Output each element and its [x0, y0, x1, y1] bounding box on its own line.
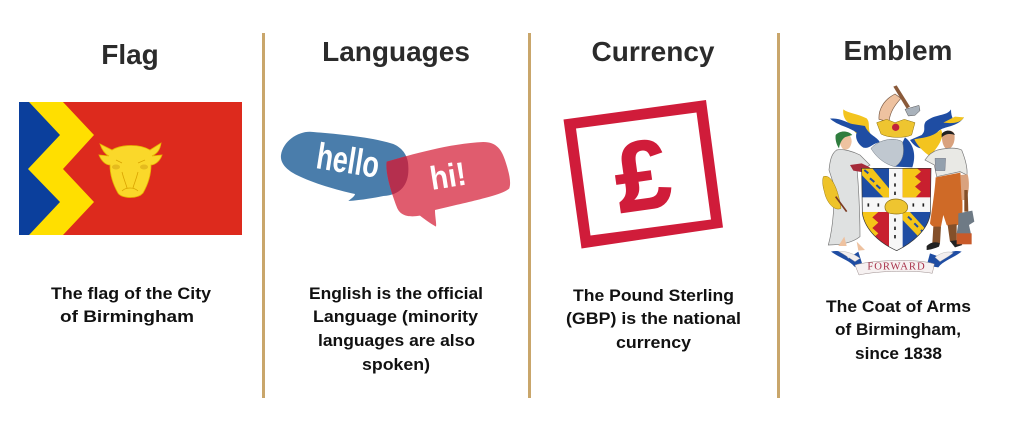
text: flag caption — [51, 285, 212, 326]
motto ribbon: FORWARD — [831, 251, 962, 275]
icon: crown — [877, 119, 915, 137]
text: languages caption — [309, 285, 483, 374]
text: emblem caption: The Coat of Arms — [826, 298, 971, 316]
icon: pound sign in tilted frame — [564, 100, 723, 248]
motto ribbon: FORWARD: FORWARD — [867, 261, 925, 272]
figure: man with anvil — [925, 131, 974, 250]
text: emblem caption: since 1838 — [855, 345, 942, 363]
icon: shield — [861, 168, 932, 251]
text: emblem caption: of Birmingham, — [835, 321, 961, 339]
heading: Flag: Flag — [101, 39, 159, 70]
icon: bull head — [99, 143, 162, 198]
icon: mantling — [830, 109, 964, 167]
text: currency caption: The Pound Sterling — [573, 287, 734, 305]
text: currency caption: currency — [616, 334, 692, 352]
text: currency caption: (GBP) is the national — [566, 310, 741, 328]
icon: pound sign in tilted frame: £ — [608, 117, 677, 234]
emblem: coat of arms — [823, 85, 974, 275]
heading: Currency: Currency — [592, 36, 715, 67]
text: flag caption: of Birmingham — [60, 308, 194, 326]
text: languages caption: Language (minority — [313, 308, 479, 326]
icon: helmet — [871, 139, 903, 167]
text: flag caption: The flag of the City — [51, 285, 212, 303]
speech bubbles: hello and hi — [281, 132, 510, 227]
flag of Birmingham — [19, 102, 242, 235]
text: currency caption — [566, 287, 741, 352]
figure: woman with palette — [823, 131, 870, 251]
text: emblem caption — [826, 298, 971, 363]
icon: arm and hammer — [879, 85, 920, 122]
text: hello: hello — [314, 135, 382, 186]
heading: Languages: Languages — [322, 36, 470, 67]
text: languages caption: English is the official — [309, 285, 483, 303]
text: languages caption: spoken) — [362, 356, 430, 374]
heading: Emblem: Emblem — [844, 35, 952, 66]
text: languages caption: languages are also — [318, 332, 475, 350]
text: hi!: hi! — [427, 155, 469, 197]
